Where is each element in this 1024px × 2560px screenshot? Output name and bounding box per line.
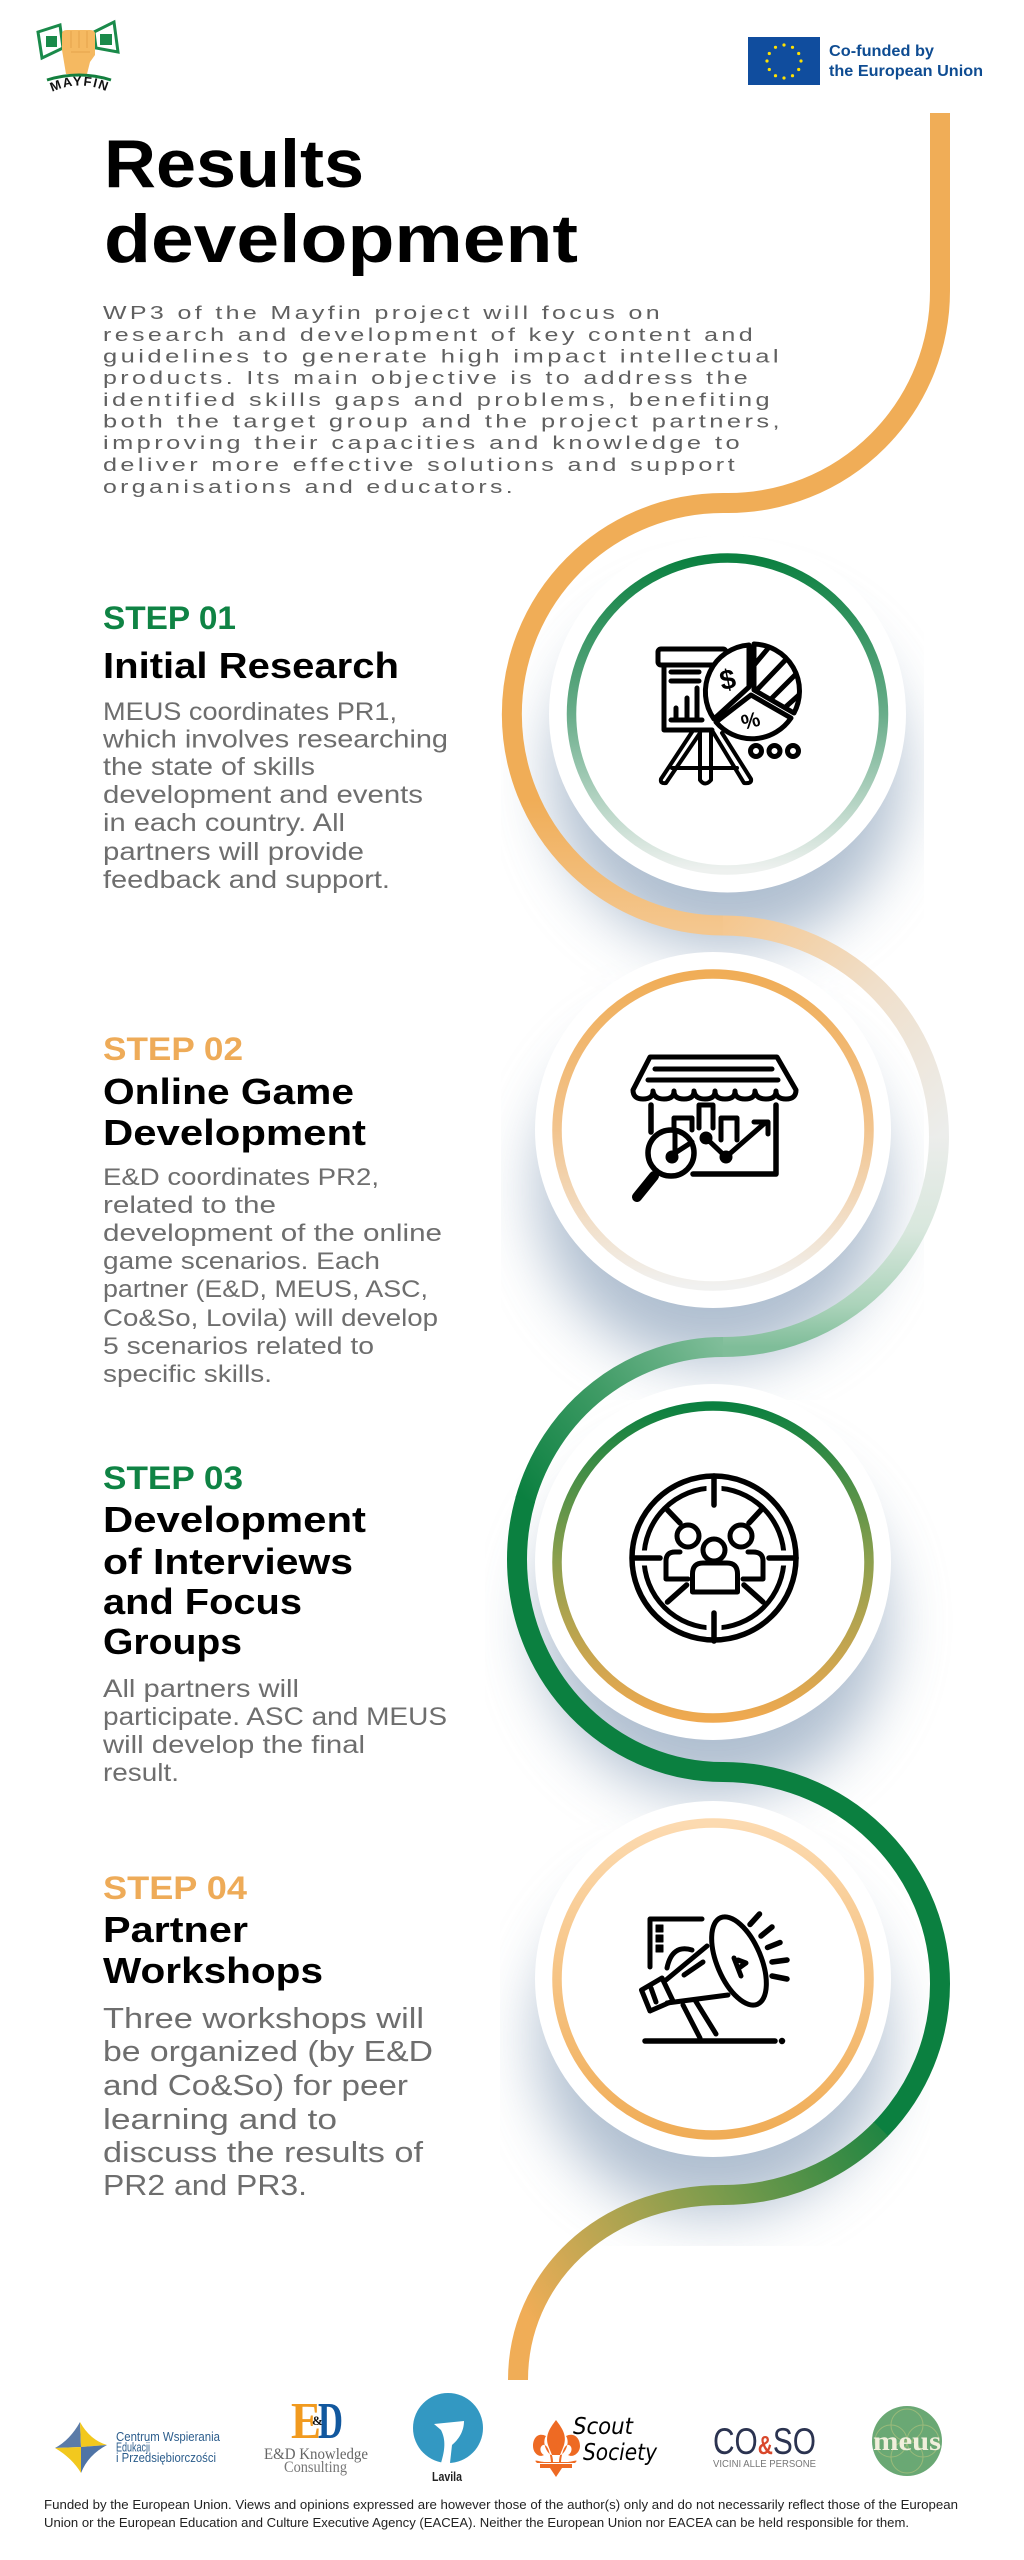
logo: CO&SO: CO&SO — [713, 2421, 816, 2462]
logo: E&D Knowledge Consulting: & — [312, 2413, 323, 2428]
intro paragraph: organisations and educators. — [103, 476, 516, 497]
step 02 text: Online Game — [103, 1071, 354, 1112]
logo: Lavila — [413, 2393, 483, 2484]
step 04 description: PR2 and PR3. — [103, 2170, 307, 2202]
step 04 description — [103, 2003, 433, 2202]
logo: E&D Knowledge Consulting: Consulting — [284, 2459, 347, 2476]
intro paragraph: WP3 of the Mayfin project will focus on — [103, 302, 663, 323]
step 04 text: STEP 04 — [103, 1870, 247, 1906]
step 04 text — [103, 1870, 433, 2202]
step 02 description: development of the online — [103, 1220, 442, 1247]
step 04 description: learning and to — [103, 2104, 337, 2136]
logo: Scout Society: Society — [583, 2440, 657, 2466]
logo: EU co-funded — [748, 37, 983, 85]
logo: E&D Knowledge Consulting — [264, 2393, 368, 2476]
step 02 description — [103, 1164, 442, 1388]
logo: meus — [872, 2406, 942, 2476]
intro paragraph: guidelines to generate high impact intellectual — [103, 346, 782, 366]
logo: Scout Society: Scout — [573, 2414, 634, 2440]
step 03 text: STEP 03 — [103, 1460, 243, 1496]
step 03 text: Groups — [103, 1621, 242, 1662]
funding disclaimer — [44, 2497, 958, 2530]
step 03 text: Development — [103, 1499, 366, 1540]
step 03 text: of Interviews — [103, 1541, 353, 1582]
intro paragraph: both the target group and the project partners, — [103, 410, 783, 432]
panel: step 04 circle — [535, 1801, 891, 2157]
funding disclaimer: Union or the European Education and Culture Executive Agency (EACEA). Neither the European Union nor EACEA can be held responsible for them. — [44, 2515, 909, 2530]
logo: EU co-funded: Co-funded by — [829, 43, 934, 60]
step 02 description: specific skills. — [103, 1361, 272, 1388]
logo: meus: meus — [873, 2426, 941, 2456]
step 02 text: Development — [103, 1112, 366, 1153]
step 02 description: related to the — [103, 1192, 276, 1219]
logo: CWEP: i Przedsiębiorczości — [116, 2451, 216, 2465]
logo: Lavila: Lavila — [432, 2469, 463, 2484]
step 01 description — [102, 698, 448, 894]
intro paragraph: research and development of key content and — [103, 324, 756, 345]
step 04 description: be organized (by E&D — [103, 2036, 433, 2068]
step 02 description: Co&So, Lovila) will develop — [103, 1305, 438, 1332]
logo: CWEP: Centrum Wspierania — [116, 2430, 220, 2444]
title: Results — [104, 126, 364, 202]
step 01 description: which involves researching — [102, 726, 448, 754]
winding ribbon — [512, 113, 940, 2380]
step 04 description: and Co&So) for peer — [103, 2070, 408, 2102]
logo: E&D Knowledge Consulting: E&D Knowledge — [264, 2446, 368, 2463]
step 04 description: discuss the results of — [103, 2137, 424, 2169]
step 01 text: Initial Research — [103, 645, 399, 686]
icon: shop with chart and magnifier — [633, 1057, 796, 1197]
step 02 description: game scenarios. Each — [103, 1248, 380, 1275]
step 03 description: participate. ASC and MEUS — [103, 1703, 447, 1731]
icon: megaphone — [642, 1909, 787, 2044]
step 03 text — [102, 1460, 447, 1787]
step 01 description: partners will provide — [103, 838, 364, 866]
step 03 description: result. — [103, 1759, 179, 1787]
intro paragraph — [103, 302, 783, 497]
step 02 description: partner (E&D, MEUS, ASC, — [103, 1276, 428, 1303]
step 03 description — [102, 1675, 447, 1787]
icon: presentation with pie chart — [658, 640, 810, 784]
icon: presentation with pie chart: % — [739, 708, 763, 735]
intro paragraph: improving their capacities and knowledge to — [103, 432, 743, 453]
funding disclaimer: Funded by the European Union. Views and opinions expressed are however those of the author(s) only and do not necessarily reflect those of the European — [44, 2497, 958, 2512]
logo: CWEP: Edukacji — [116, 2440, 150, 2454]
step 03 text: and Focus — [103, 1581, 302, 1622]
logo: Scout Society — [533, 2414, 657, 2477]
step 02 text: STEP 02 — [103, 1031, 243, 1067]
logo: CO&SO: VICINI ALLE PERSONE — [713, 2458, 816, 2470]
panel: step 01 circle — [549, 536, 906, 892]
step 01 description: feedback and support. — [103, 866, 390, 894]
logo: E&D Knowledge Consulting: E — [291, 2393, 321, 2450]
panel: step 02 circle — [535, 952, 891, 1308]
step 01 description: MEUS coordinates PR1, — [103, 698, 397, 726]
intro paragraph: products. Its main objective is to address the — [103, 367, 751, 388]
step 03 description: All partners will — [103, 1675, 299, 1703]
step 01 description: development and events — [103, 781, 423, 809]
step 04 text: Partner — [103, 1909, 248, 1950]
step 01 description: in each country. All — [103, 809, 345, 837]
step 01 text: STEP 01 — [103, 600, 236, 636]
icon: target with people — [632, 1476, 796, 1641]
step 04 text: Workshops — [103, 1950, 323, 1991]
logo: Mayfin — [36, 20, 120, 92]
logo: Mayfin: MAYFIN — [50, 76, 108, 92]
panel: step 03 circle — [535, 1384, 891, 1740]
intro paragraph: identified skills gaps and problems, benefiting — [103, 389, 773, 410]
title: development — [104, 201, 578, 277]
step 02 description: 5 scenarios related to — [103, 1333, 374, 1360]
title — [104, 126, 578, 277]
step 01 text — [102, 600, 448, 894]
intro paragraph: deliver more effective solutions and support — [103, 454, 738, 475]
logo: E&D Knowledge Consulting: D — [318, 2393, 343, 2450]
step 04 description: Three workshops will — [103, 2003, 424, 2035]
logo: EU co-funded: the European Union — [829, 63, 983, 80]
icon: presentation with pie chart: $ — [717, 663, 739, 696]
logo: CWEP — [55, 2422, 220, 2473]
step 01 description: the state of skills — [103, 753, 315, 781]
step 02 description: E&D coordinates PR2, — [103, 1164, 379, 1191]
step 03 description: will develop the final — [102, 1731, 365, 1759]
step 02 text — [103, 1031, 442, 1388]
circle shadows — [538, 600, 902, 2214]
